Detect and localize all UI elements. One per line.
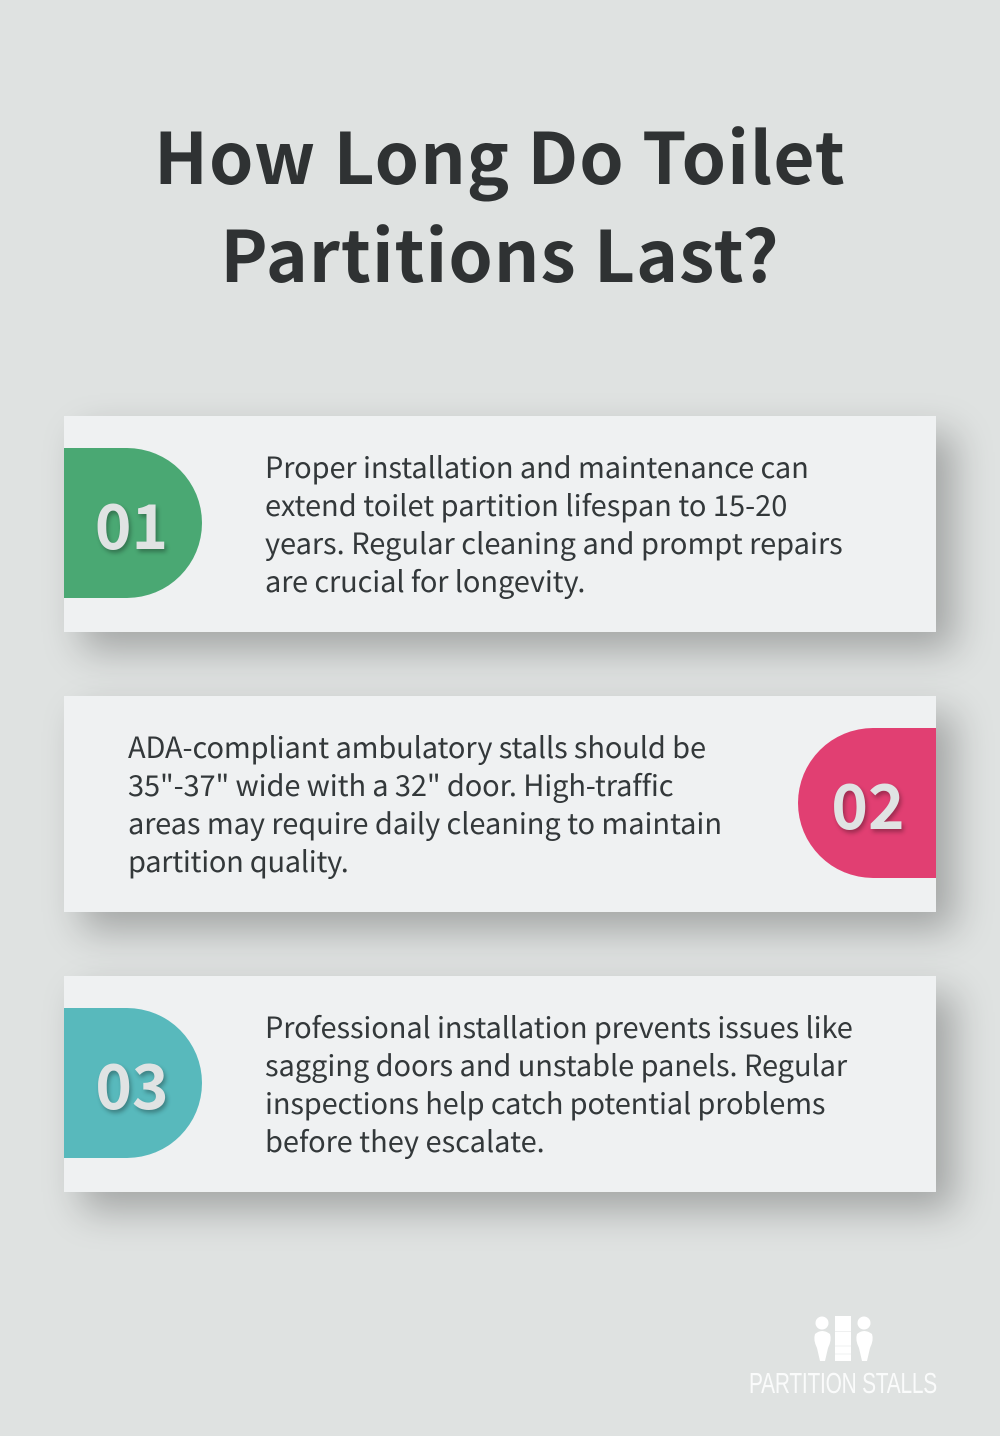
text: step 03: Professional installation prevents issues like: [265, 1005, 853, 1047]
text: step 03: [265, 1005, 853, 1161]
logo: Partition Stalls: [749, 1316, 937, 1400]
badge: 02: 02: [831, 757, 905, 847]
badge: 03: 03: [95, 1037, 169, 1127]
text: step 01: extend toilet partition lifespan to 15-20: [265, 483, 787, 525]
text: step 02: areas may require daily cleaning to maintain: [128, 801, 722, 843]
logo text: PARTITION STALLS: [749, 1368, 937, 1400]
badge: 03: [64, 1008, 202, 1158]
title: [154, 103, 846, 303]
panel: step 01: [64, 416, 936, 632]
text: step 01: years. Regular cleaning and prompt repairs: [265, 521, 843, 563]
text: step 01: Proper installation and maintenance can: [265, 445, 809, 487]
panel: step 03: [64, 976, 936, 1192]
text: step 03: before they escalate.: [265, 1119, 545, 1161]
text: step 02: partition quality.: [128, 839, 349, 881]
title: How Long Do Toilet: [154, 103, 846, 205]
badge: 02: [798, 728, 936, 878]
text: step 02: 35"-37" wide with a 32" door. High-traffic: [128, 763, 673, 805]
badge: 01: 01: [95, 477, 168, 567]
panel: step 02: [64, 696, 936, 912]
text: step 03: inspections help catch potential problems: [265, 1081, 825, 1123]
icon: two people and partition: [814, 1316, 872, 1361]
text: step 01: are crucial for longevity.: [265, 559, 585, 601]
text: step 01: [265, 445, 843, 601]
text: step 03: sagging doors and unstable panels. Regular: [265, 1043, 847, 1085]
text: step 02: [128, 725, 722, 881]
text: step 02: ADA-compliant ambulatory stalls should be: [128, 725, 706, 767]
title: Partitions Last?: [220, 201, 780, 303]
badge: 01: [64, 448, 202, 598]
